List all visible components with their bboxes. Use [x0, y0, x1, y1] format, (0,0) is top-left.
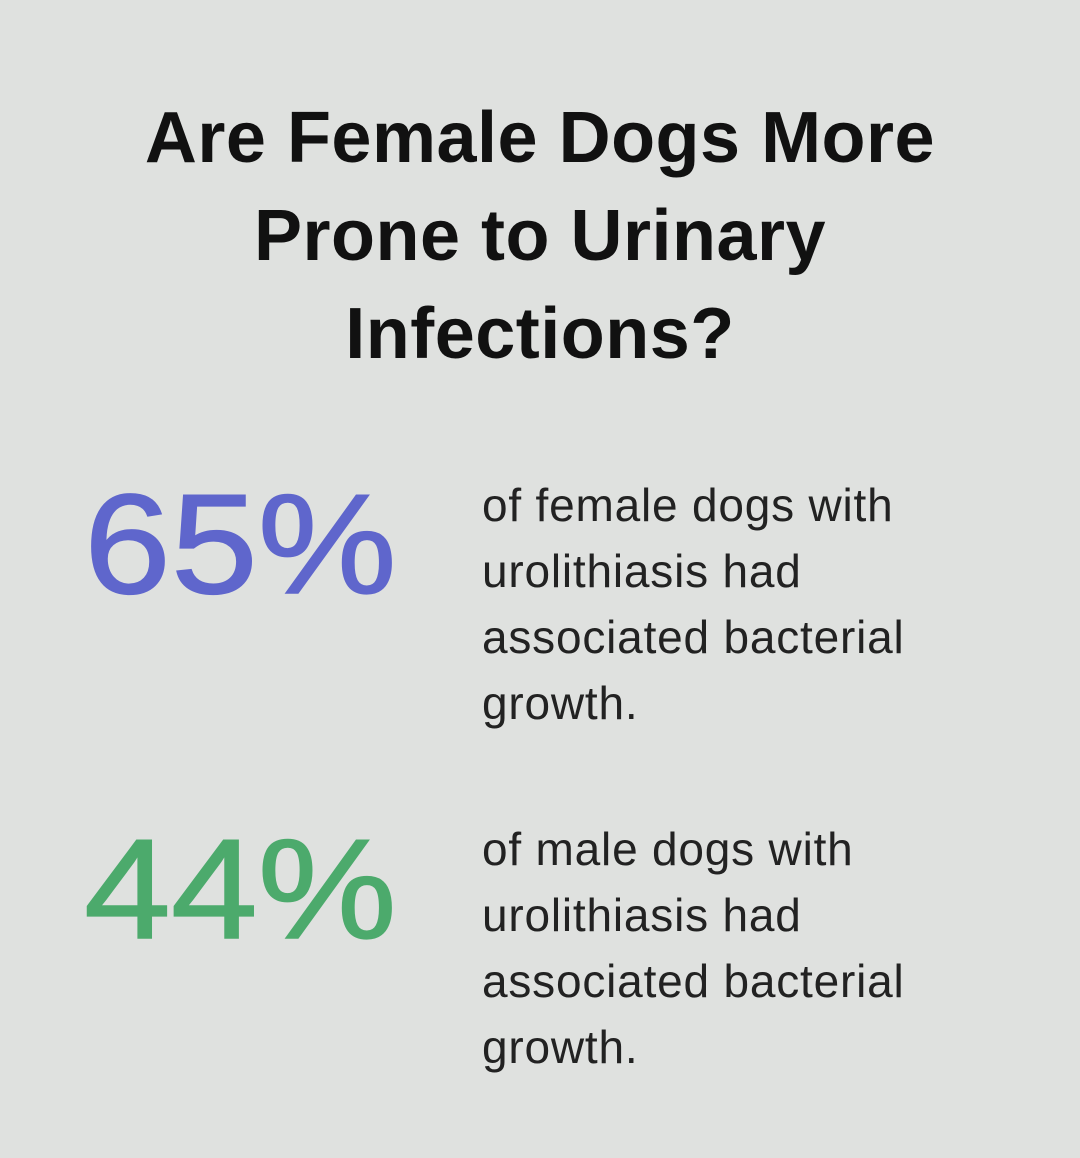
- title: Prone to Urinary: [254, 196, 826, 276]
- text: male description: [482, 823, 905, 1073]
- title: Infections?: [345, 294, 735, 374]
- title: Are Female Dogs More: [145, 98, 935, 178]
- text: female description: associated bacterial: [482, 611, 905, 663]
- text: female description: growth.: [482, 677, 638, 729]
- stat: female percentage: 65%: [84, 465, 397, 624]
- stat: male percentage: 44%: [84, 810, 397, 969]
- text: male description: growth.: [482, 1021, 638, 1073]
- text: male description: urolithiasis had: [482, 889, 802, 941]
- text: male description: associated bacterial: [482, 955, 905, 1007]
- text: female description: of female dogs with: [482, 479, 894, 531]
- text: male description: of male dogs with: [482, 823, 854, 875]
- title: [145, 98, 935, 374]
- text: female description: [482, 479, 905, 729]
- text: female description: urolithiasis had: [482, 545, 802, 597]
